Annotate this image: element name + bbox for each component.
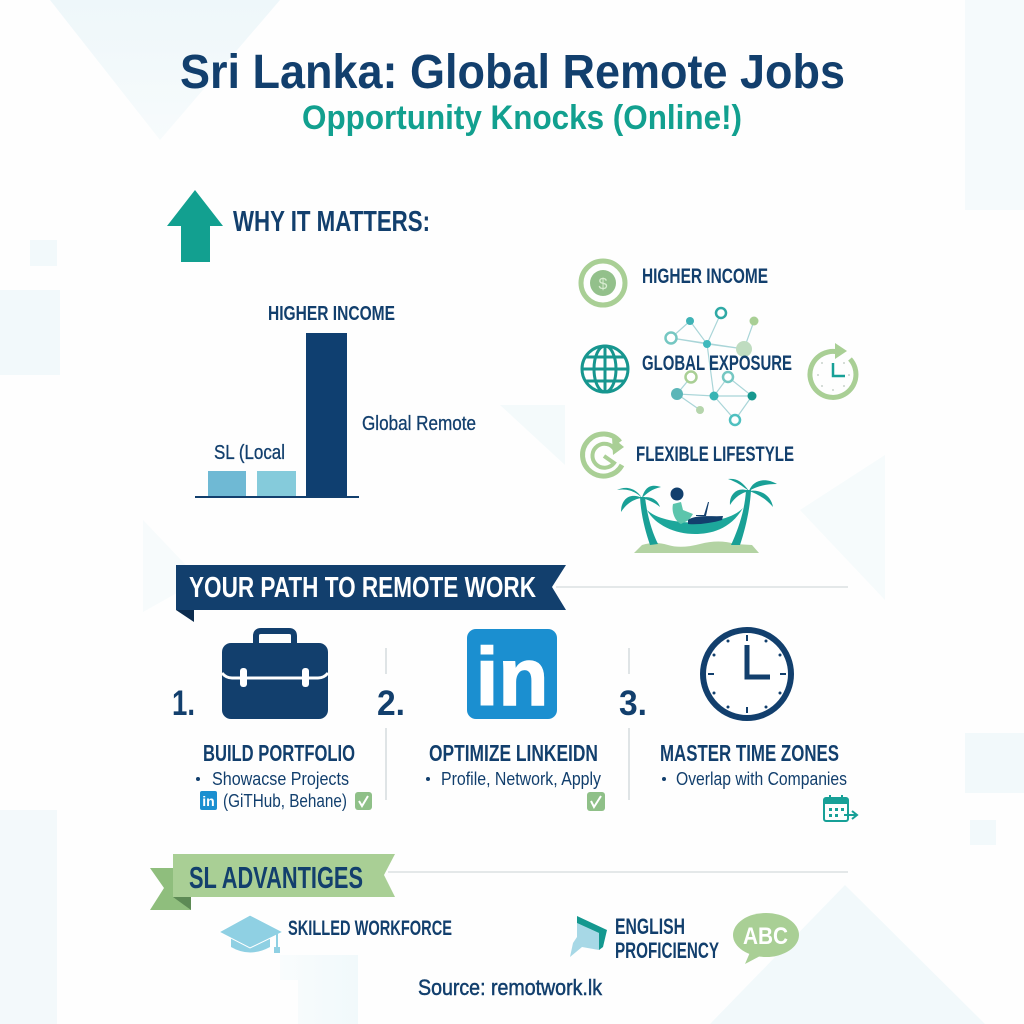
step title: MASTER TIME ZONES xyxy=(660,740,839,766)
icon: flexible circular arrow xyxy=(583,434,624,476)
label: SKILLED WORKFORCE xyxy=(288,917,452,940)
icon: hammock with palm trees xyxy=(617,479,777,553)
icon: briefcase xyxy=(222,631,328,719)
icon: teal ribbon xyxy=(570,916,607,957)
step 3: master time zones xyxy=(619,630,857,821)
icon: clock with arrow xyxy=(810,343,856,397)
icon: small linkedin xyxy=(200,791,217,810)
icon: ABC speech bubble xyxy=(733,913,799,964)
icon: coin: $ xyxy=(599,276,608,293)
icon: coin xyxy=(581,261,625,305)
icon: calendar xyxy=(824,795,857,821)
icon: up arrow xyxy=(167,190,223,262)
panel: why it matters heading xyxy=(167,190,430,262)
label: SL local: SL (Local xyxy=(214,442,285,464)
subtitle: Opportunity Knocks (Online!) xyxy=(302,99,742,137)
step title: BUILD PORTFOLIO xyxy=(203,740,355,766)
label: higher income: HIGHER INCOME xyxy=(642,265,768,288)
step title: OPTIMIZE LINKEIDN xyxy=(429,740,598,766)
text: tools: (GiTHub, Behane) xyxy=(223,791,347,811)
section banner: SL advantages: SL ADVANTIGES xyxy=(189,860,363,895)
advantage: english proficiency xyxy=(570,913,799,964)
title: Sri Lanka: Global Remote Jobs xyxy=(180,46,845,99)
section banner: your path to remote work xyxy=(176,565,848,622)
source line: Source: remotwork.lk xyxy=(418,975,603,1000)
bar: global remote xyxy=(306,333,347,497)
icon: check xyxy=(355,792,372,810)
icon: clock xyxy=(703,630,791,718)
icon: check xyxy=(587,792,605,811)
label: global exposure: GLOBAL EXPOSURE xyxy=(642,352,792,375)
icon: globe xyxy=(582,346,628,392)
bullet text: Showacse Projects xyxy=(212,769,349,789)
bar: SL local 2 xyxy=(257,471,296,497)
step 2: optimize linkedin xyxy=(377,629,605,811)
heading: why it matters: WHY IT MATTERS: xyxy=(233,206,430,238)
number 2: 2. xyxy=(377,684,405,723)
section banner: your path to remote work: YOUR PATH TO REMOTE WORK xyxy=(189,572,536,604)
step 1: build portfolio xyxy=(172,631,372,811)
icon: small linkedin: in xyxy=(202,793,215,809)
bullet text: Profile, Network, Apply xyxy=(441,769,601,789)
advantage: skilled workforce xyxy=(219,915,452,953)
label: ENGLISH xyxy=(615,914,685,939)
panel: benefits xyxy=(581,261,856,553)
number 1: 1. xyxy=(172,684,195,723)
section banner: SL advantages xyxy=(150,854,848,910)
bar: SL local 1 xyxy=(208,471,246,497)
bar chart: income comparison xyxy=(195,303,476,498)
label: flexible lifestyle: FLEXIBLE LIFESTYLE xyxy=(636,443,794,466)
icon: network xyxy=(666,308,758,425)
label: global remote: Global Remote xyxy=(362,413,476,435)
number 3: 3. xyxy=(619,684,647,723)
bullet text: Overlap with Companies xyxy=(676,769,847,789)
icon: linkedin: in xyxy=(476,632,548,723)
icon: graduation cap xyxy=(219,915,283,953)
label: higher income: HIGHER INCOME xyxy=(268,303,395,325)
icon: ABC speech bubble: ABC xyxy=(743,923,788,950)
advantage: english proficiency: PROFICIENCY xyxy=(615,938,719,963)
